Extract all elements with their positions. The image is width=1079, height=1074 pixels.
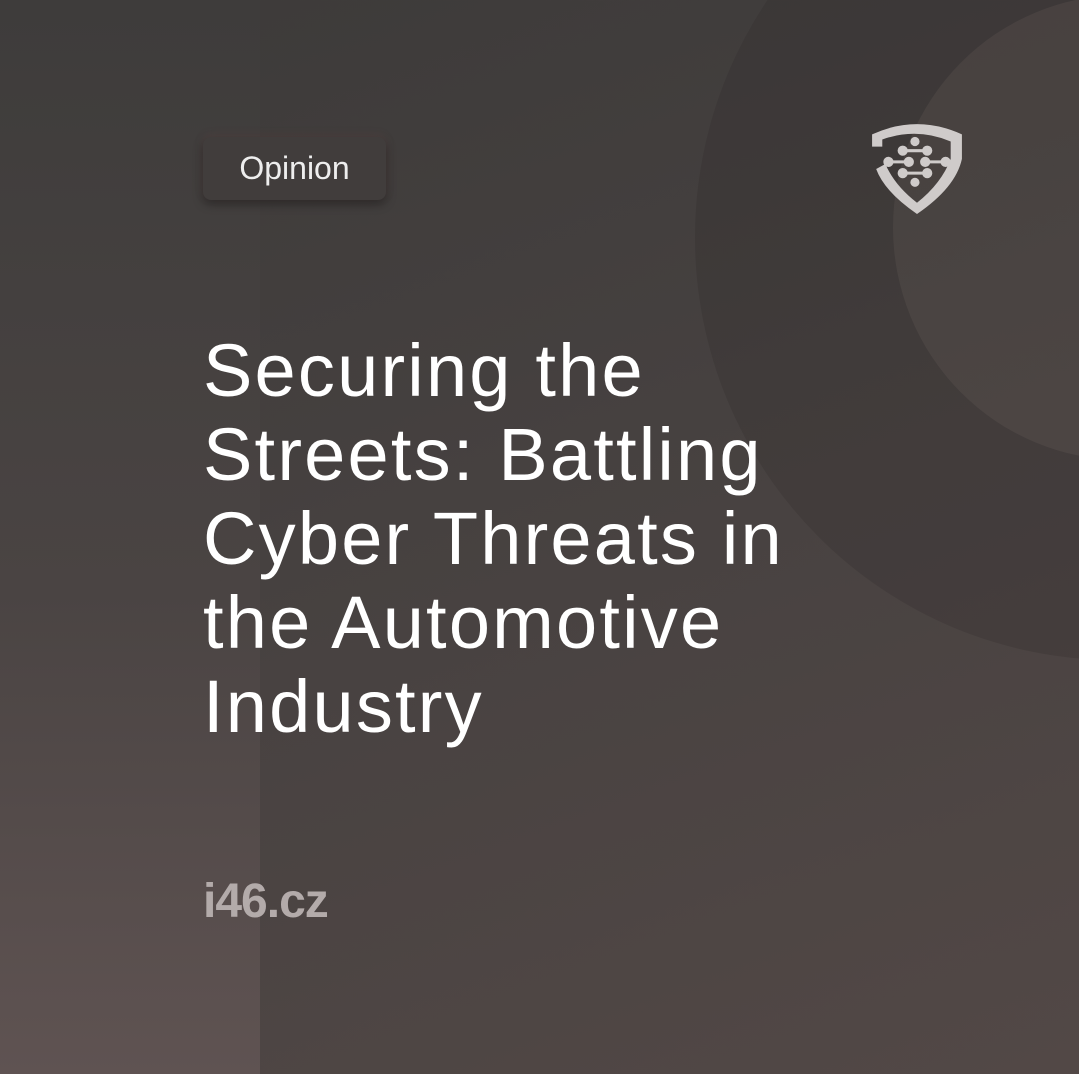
title: the Automotive (203, 581, 723, 664)
badge: Opinion: Opinion (239, 150, 350, 186)
title: Securing the (203, 329, 645, 412)
title: Industry (203, 665, 484, 748)
badge: Opinion (203, 137, 386, 200)
url text: i46.cz (203, 875, 328, 928)
title: Streets: Battling (203, 413, 763, 496)
icon: shield logo (872, 124, 962, 214)
title: Cyber Threats in (203, 497, 784, 580)
title (203, 329, 784, 748)
